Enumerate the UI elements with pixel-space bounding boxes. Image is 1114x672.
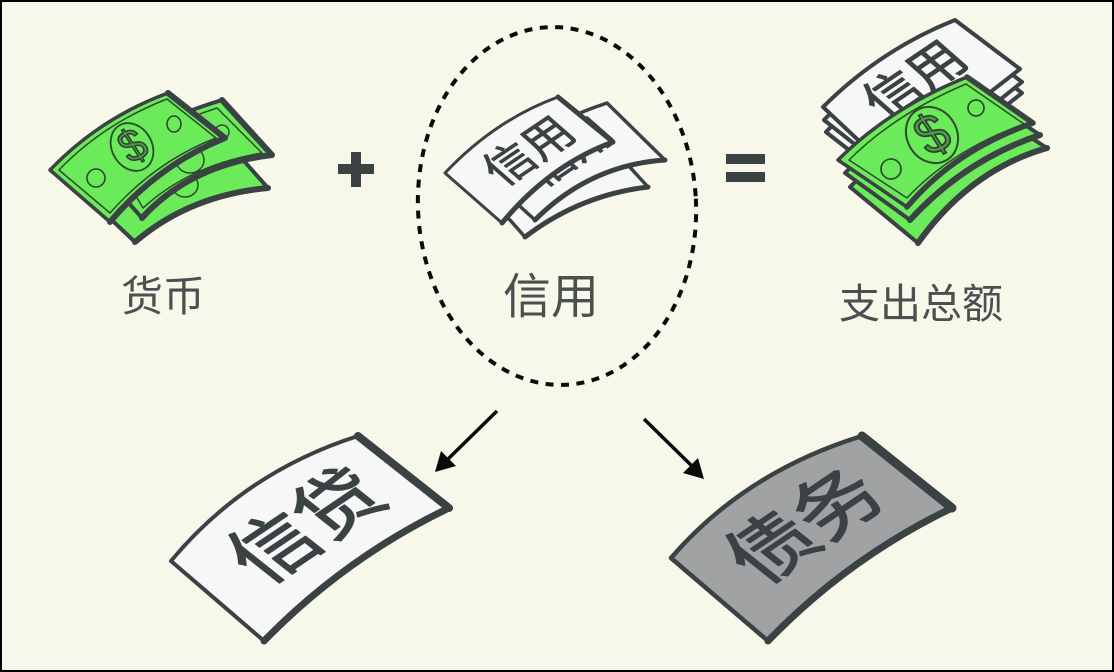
label: money: 货币 bbox=[121, 273, 205, 320]
icon: total spending stack: $ bbox=[902, 101, 962, 167]
card: credit loan: 信贷 bbox=[208, 455, 406, 597]
arrow: to credit note bbox=[435, 411, 497, 472]
icon: stack of credit notes: 信用 bbox=[471, 108, 587, 194]
icon: total spending stack bbox=[823, 20, 1047, 243]
dashed ellipse highlight bbox=[409, 20, 705, 392]
card: debt bbox=[671, 436, 952, 641]
icon: stack of credit notes: 信用 bbox=[510, 109, 626, 195]
card: debt: 债务 bbox=[706, 455, 904, 597]
icon: stack of money bbox=[50, 93, 272, 242]
label: credit: 信用 bbox=[503, 271, 599, 324]
icon: total spending stack: 信用 bbox=[851, 32, 981, 129]
plus sign bbox=[338, 152, 374, 187]
label: total spending: 支出总额 bbox=[839, 281, 1003, 327]
icon: stack of credit notes bbox=[445, 97, 665, 237]
card: credit loan bbox=[171, 436, 449, 641]
arrow: to debt note bbox=[644, 419, 704, 479]
equals sign bbox=[726, 154, 765, 182]
icon: stack of money: $ bbox=[109, 119, 158, 173]
